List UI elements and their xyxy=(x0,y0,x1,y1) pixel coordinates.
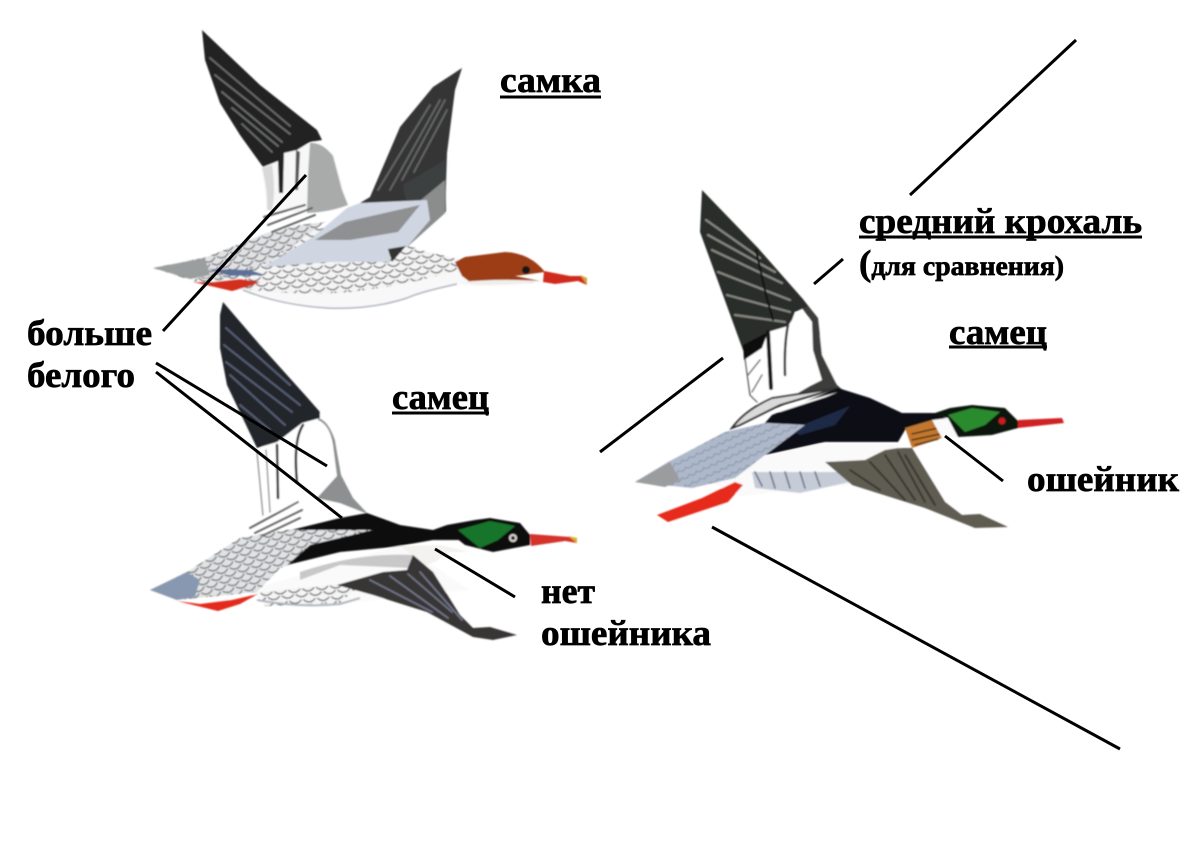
foot xyxy=(657,482,743,522)
head xyxy=(447,518,577,552)
front wing xyxy=(825,448,1008,528)
callout line: short wing mark xyxy=(814,259,843,284)
bird: male goosander xyxy=(150,302,577,640)
callout line: female to wing xyxy=(163,175,306,331)
back wing xyxy=(220,302,368,516)
callout line: male wing lower xyxy=(156,372,342,518)
head xyxy=(905,405,1064,448)
bird: female merganser xyxy=(153,30,587,308)
label: нет ошейника: нет xyxy=(541,571,595,611)
callout line: no collar xyxy=(435,549,515,597)
body xyxy=(150,502,470,606)
body xyxy=(635,388,950,496)
label: больше белого xyxy=(27,313,152,395)
back wing xyxy=(202,30,348,213)
head xyxy=(455,252,587,285)
front wing xyxy=(300,555,517,640)
callout line: left of wing xyxy=(600,358,723,452)
label: для сравнения: (для сравнения) xyxy=(859,243,1064,283)
label: ошейник: ошейник xyxy=(1027,459,1179,499)
body xyxy=(153,200,540,308)
foot xyxy=(177,594,258,611)
label: нет ошейника: ошейника xyxy=(541,613,711,653)
back wing xyxy=(700,190,845,415)
label: средний крохаль: средний крохаль xyxy=(859,201,1142,241)
front wing xyxy=(360,68,462,247)
callout line: below foot xyxy=(712,527,1120,749)
label: нет ошейника xyxy=(541,571,711,653)
label: больше белого: белого xyxy=(27,355,135,395)
bird: red-breasted merganser xyxy=(635,190,1064,528)
callout line: male wing upper xyxy=(156,363,327,466)
callout line: collar xyxy=(945,436,1003,481)
foot xyxy=(193,279,260,291)
label: больше белого: больше xyxy=(27,313,152,353)
callout line: top right diagonal xyxy=(910,40,1076,195)
label: самка: самка xyxy=(500,60,601,100)
label: самец (left): самец xyxy=(392,377,489,417)
label: самец (right): самец xyxy=(949,312,1047,352)
